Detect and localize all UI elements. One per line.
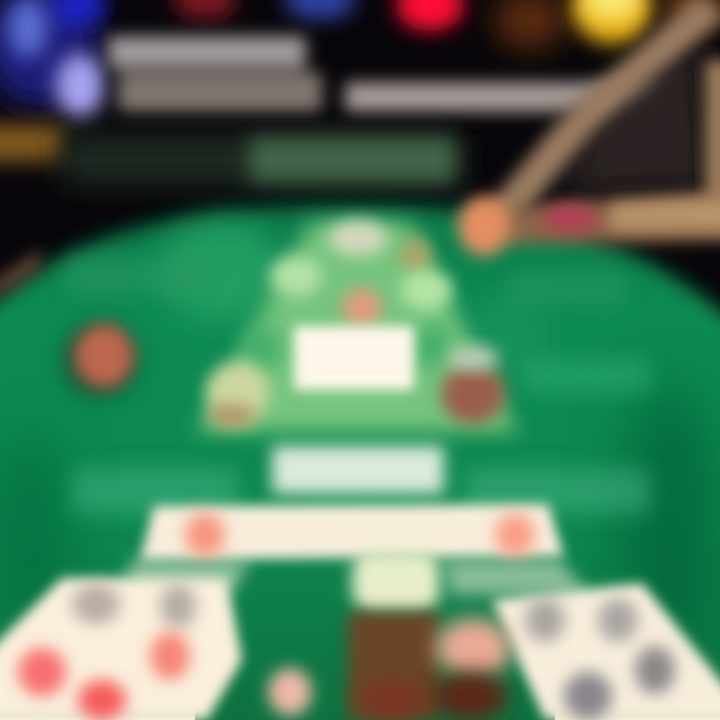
background lights (0, 0, 720, 118)
chip stack left on arc (206, 362, 270, 428)
centre chip stacks at the bottom (268, 550, 512, 720)
betting arc in the centre (196, 220, 518, 432)
centre card (294, 326, 414, 390)
felt faint markings (65, 258, 650, 514)
green felt table (0, 205, 720, 720)
player cards bottom left (0, 578, 242, 720)
white label plate (272, 446, 444, 494)
blurred sign text (108, 36, 661, 112)
table rail (0, 124, 462, 185)
wide card row (125, 504, 590, 595)
player cards bottom right (492, 583, 720, 720)
hand and arms of dealer (458, 0, 720, 256)
chip stack far left (64, 324, 136, 396)
chip stack right on arc (441, 346, 505, 424)
